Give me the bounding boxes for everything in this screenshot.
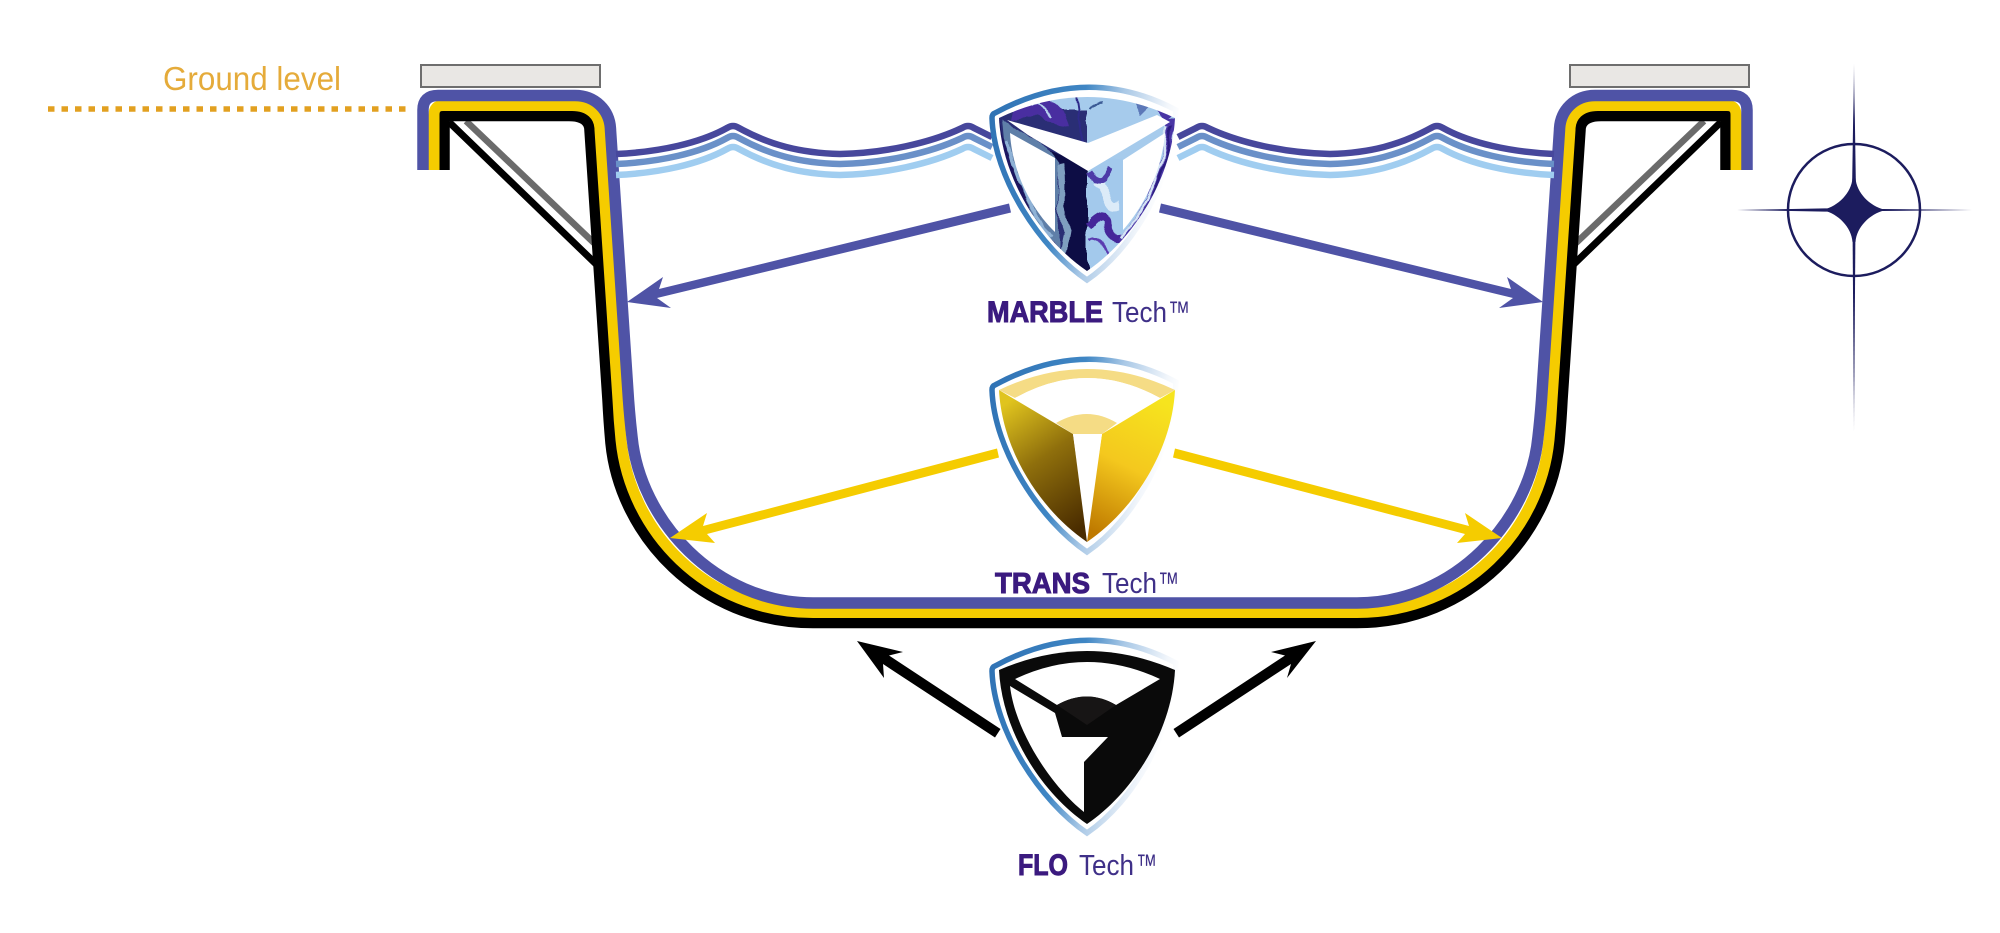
TRANS layer (yellow)	[434, 106, 1736, 612]
right white panel	[1123, 133, 1165, 230]
arrow: trans right	[1173, 448, 1502, 543]
circle	[1788, 144, 1920, 276]
white left blade	[1010, 686, 1108, 812]
MARBLE Tech label: Tech	[1112, 297, 1167, 329]
hub highlight	[1057, 696, 1116, 725]
FLO shield	[992, 640, 1176, 833]
FLO Tech label: ™	[1136, 849, 1157, 882]
MARBLE layer (blue)	[423, 96, 1747, 603]
right coping slab	[1570, 65, 1749, 87]
shield outline	[992, 359, 1176, 552]
white top band	[1015, 662, 1160, 705]
TRANS shield	[992, 359, 1176, 552]
water waves left	[616, 126, 992, 175]
TRANS Tech label: ™	[1158, 567, 1179, 600]
star	[1824, 178, 1884, 242]
upper arc	[999, 369, 1175, 398]
left white panel	[1010, 133, 1055, 232]
right wall brace	[1573, 121, 1721, 265]
arrow: marble right	[1159, 204, 1543, 308]
arrow: trans left	[670, 448, 999, 543]
TRANS Tech label	[995, 567, 1179, 600]
black body	[999, 651, 1175, 824]
FLO Tech label: Tech	[1079, 850, 1134, 882]
inner arc	[1056, 414, 1117, 434]
TRANS Tech label: TRANS	[995, 568, 1090, 600]
arrow: flo right	[1174, 641, 1316, 738]
MARBLE Tech label: ™	[1168, 296, 1190, 329]
ground level dotted line	[48, 106, 408, 112]
arrow: flo left	[857, 641, 1000, 738]
TRANS Tech label: Tech	[1102, 568, 1157, 600]
left wall brace	[449, 121, 597, 265]
white chevron	[1007, 115, 1170, 171]
white wedge	[1073, 434, 1102, 533]
MARBLE shield	[989, 84, 1175, 284]
vertical needle	[1852, 63, 1856, 432]
FLO Tech label	[1018, 849, 1157, 882]
FLO Tech label: FLO	[1018, 849, 1068, 882]
shield outline	[992, 640, 1176, 833]
MARBLE Tech label: MARBLE	[987, 296, 1103, 329]
shield outline	[992, 87, 1176, 280]
horizontal needle	[1737, 208, 1972, 212]
FLO layer (black)	[444, 116, 1726, 622]
arrow: marble left	[627, 204, 1011, 308]
marble texture	[999, 97, 1175, 271]
compass star icon	[1737, 63, 1972, 432]
water waves right	[1178, 126, 1554, 175]
white top band	[1015, 378, 1160, 423]
left face	[999, 390, 1087, 542]
ground level label: Ground level	[163, 60, 341, 97]
MARBLE Tech label	[987, 296, 1190, 329]
right face	[1087, 390, 1175, 542]
pool shell layers	[423, 96, 1747, 622]
left coping slab	[421, 65, 600, 87]
